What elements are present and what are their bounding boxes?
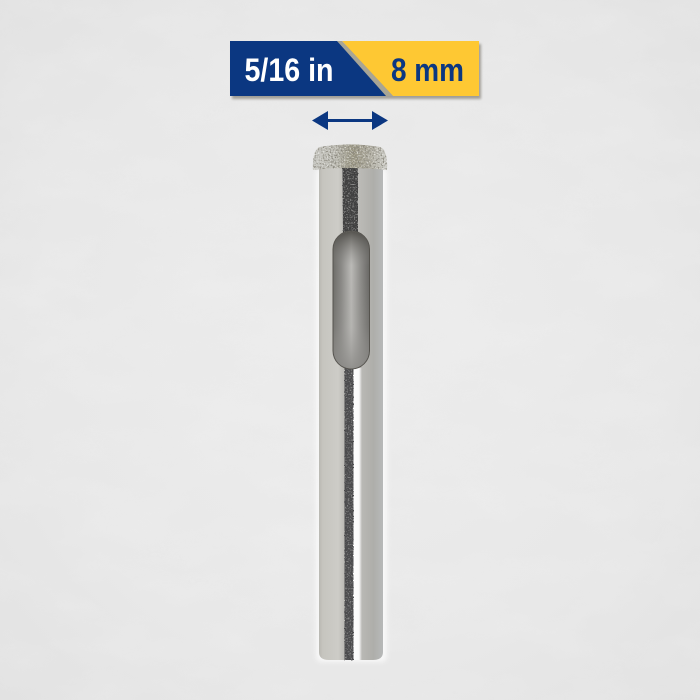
dark reflection stripe, lower [344,368,354,660]
dark reflection stripe, upper [342,168,358,234]
stripe speckle [343,168,358,660]
label: 8 mm: 8 mm [391,52,464,88]
drill bit [313,144,387,662]
badge shadow [232,44,481,99]
shaft [319,168,383,660]
label: 5/16 in: 5/16 in [244,52,334,88]
divider shadow [337,41,393,96]
diamond-coated tip [313,144,387,170]
bit glow outline [316,168,387,662]
white highlight stripe [352,368,362,660]
double-headed width arrow [312,111,388,130]
oblong slot opening [332,230,370,370]
tip grit [313,144,387,170]
yellow panel: metric [342,41,479,96]
blue panel: imperial [230,41,386,96]
size badge [230,41,481,99]
